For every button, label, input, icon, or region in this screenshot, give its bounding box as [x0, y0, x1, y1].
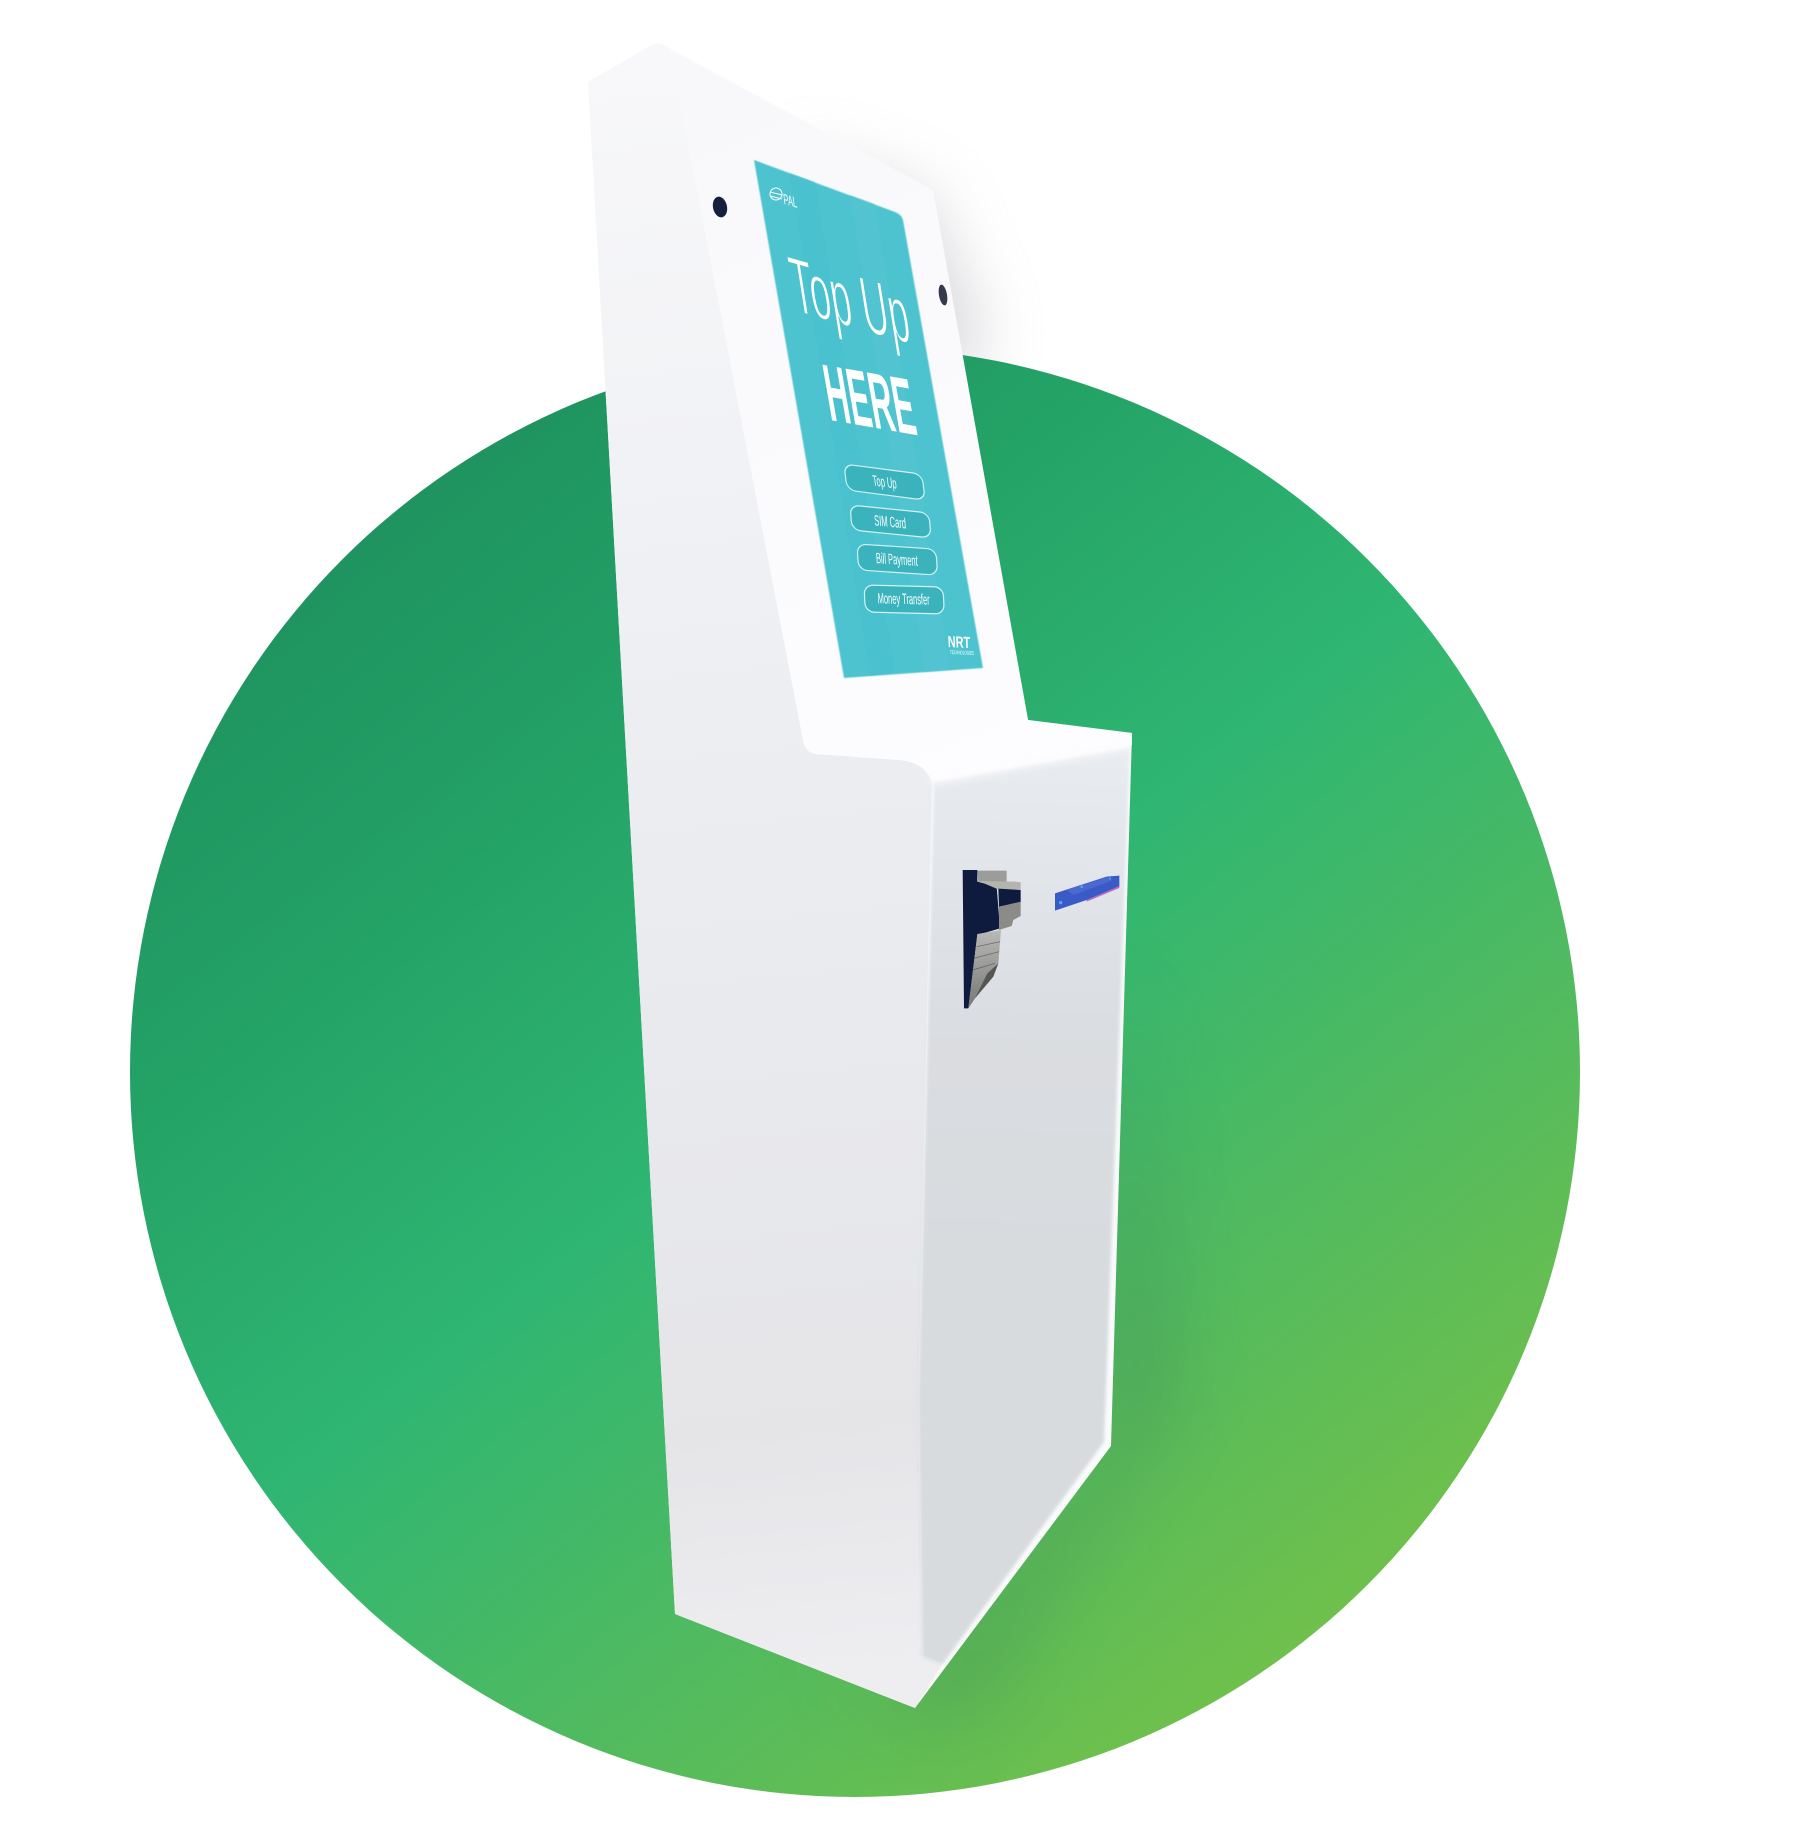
button: Top Up	[844, 464, 925, 500]
screen background	[754, 160, 983, 678]
kiosk white silhouette	[588, 44, 1132, 1708]
kiosk side face	[588, 44, 942, 1708]
kiosk right face	[918, 742, 1132, 1665]
button: Money Transfer: Money Transfer	[877, 589, 930, 608]
screen	[754, 160, 983, 678]
button: Bill Payment: Bill Payment	[875, 549, 919, 570]
heading: HERE: HERE	[817, 347, 922, 454]
button: SIM Card	[850, 505, 931, 538]
logo: NRT: NRT	[947, 633, 971, 652]
kiosk shadow on circle	[922, 1187, 1182, 1712]
button: Bill Payment	[857, 544, 938, 575]
logo: PAL	[770, 188, 798, 212]
kiosk	[588, 44, 1132, 1708]
logo: NRT: TECHNOLOGIES	[950, 649, 974, 656]
camera right	[937, 284, 949, 306]
logo: NRT	[947, 633, 974, 656]
infographic: kiosk on green circle	[130, 110, 1580, 1797]
camera left	[711, 195, 729, 219]
heading: Top Up: Top Up	[784, 240, 916, 362]
button: Top Up: Top Up	[872, 472, 898, 492]
button: Money Transfer	[864, 585, 944, 614]
logo: PAL: PAL	[782, 190, 798, 212]
card reader	[1055, 876, 1119, 911]
green gradient circle	[130, 347, 1580, 1797]
bill acceptor slot	[963, 870, 1021, 1008]
button: SIM Card: SIM Card	[874, 511, 907, 532]
kiosk front plate	[670, 50, 1132, 782]
kiosk soft shadow on white background	[800, 150, 985, 400]
